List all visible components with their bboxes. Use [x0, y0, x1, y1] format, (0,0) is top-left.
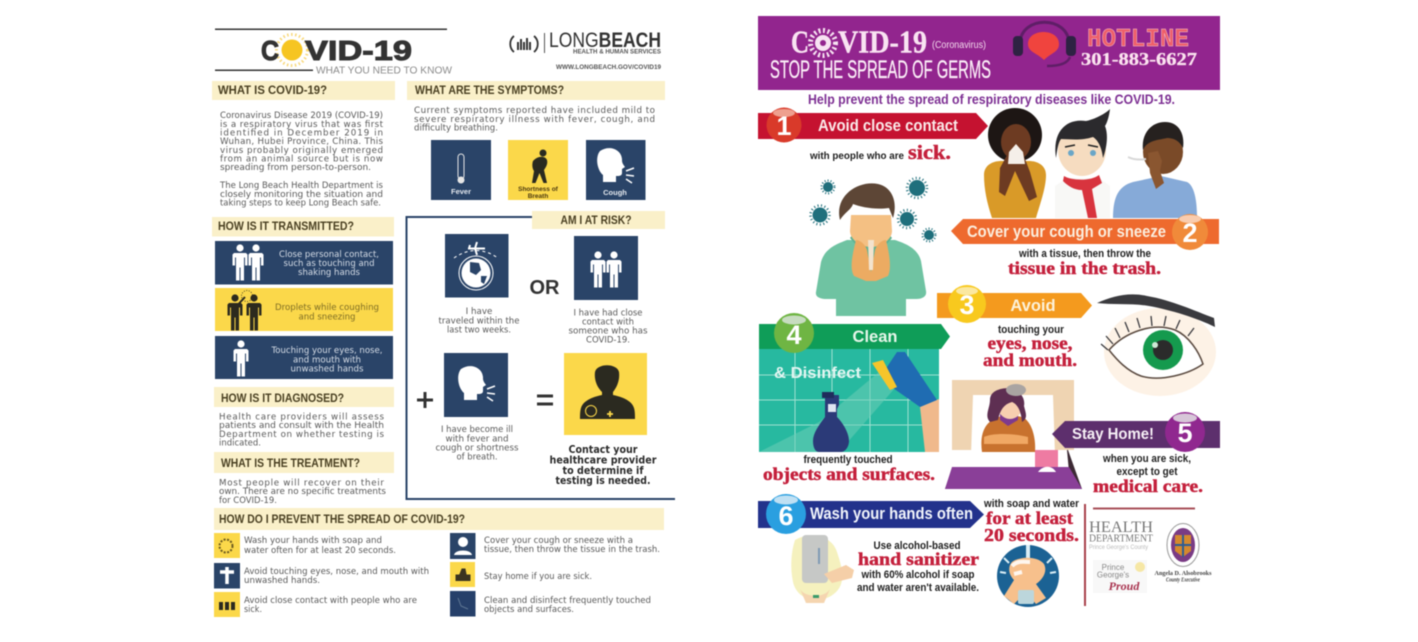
tip: avoid touching: unwashed hands. [244, 576, 320, 586]
tip: avoid close contact: sick. [244, 605, 262, 615]
logo: health department [1089, 519, 1154, 551]
title: COVID-19: C [791, 24, 809, 60]
caption: hand sanitizer [857, 540, 979, 594]
icon: city skyline [510, 36, 538, 52]
text: travelled: I have [466, 307, 492, 317]
heading: WHAT IS THE TREATMENT? [221, 458, 360, 470]
step 3: avoid touching [937, 285, 1092, 370]
illustration: sick woman in bed [945, 380, 1082, 489]
caption [1093, 453, 1203, 496]
subtitle: WHAT YOU NEED TO KNOW [316, 64, 452, 76]
body text: taking steps to keep Long Beach safe. [220, 198, 381, 208]
plus sign [417, 392, 433, 408]
body text [219, 412, 384, 448]
tip: avoid close contact: Avoid close contact with people who are [244, 596, 417, 606]
logo: Prince George's Proud: George's [1097, 570, 1129, 580]
icon: doctor [564, 353, 647, 435]
body text: severe respiratory illness with fever, cough, and [414, 115, 655, 125]
coronavirus label: (Coronavirus) [932, 40, 986, 51]
text: close contact: I have had close [574, 308, 642, 318]
tip: avoid close contact [214, 592, 417, 617]
icon: shortness of breath [508, 140, 568, 200]
title letters VID-19: VID-19 [305, 35, 412, 66]
tile background [759, 349, 939, 452]
card: touching face [215, 336, 393, 379]
equals sign [537, 396, 553, 404]
caption: objects and surfaces. [763, 464, 935, 484]
phone number: 301-883-6627 [1081, 49, 1197, 69]
step 5: stay home: Stay Home! [1072, 426, 1154, 443]
icon: shortness of breath: Shortness of [518, 186, 559, 193]
body text: for COVID-19. [219, 496, 277, 506]
logo: health department: HEALTH [1089, 519, 1153, 536]
title: COVID-19: VID-19 [838, 24, 927, 60]
tip: stay home: Stay home if you are sick. [484, 572, 592, 582]
body text: Coronavirus Disease 2019 (COVID-19) [220, 111, 383, 121]
icon: fever [431, 140, 491, 200]
rule above title [215, 28, 447, 30]
caption: sick. [908, 142, 951, 164]
step 2: cover your cough [951, 214, 1219, 278]
text: close contact: COVID-19. [586, 336, 630, 346]
panel: am I at risk [406, 211, 675, 499]
caption [809, 142, 951, 164]
subtitle: STOP THE SPREAD OF GERMS [770, 56, 991, 84]
caption: hand sanitizer: Use alcohol-based [874, 540, 960, 552]
step 5: stay home [1052, 412, 1220, 496]
hotline: HOTLINE [1087, 24, 1189, 54]
section: what is COVID-19 [212, 81, 395, 208]
step 5: stay home: 5 [1177, 418, 1193, 448]
step 6: wash your hands: 6 [778, 501, 794, 531]
logo wordmark: LONGBEACH [549, 29, 661, 52]
step 1: avoid close contact: 1 [776, 111, 792, 141]
step 3: avoid touching: Avoid [1010, 297, 1056, 315]
subheading: Help prevent the spread of respiratory diseases like COVID-19. [808, 91, 1175, 107]
icon: headset [1013, 22, 1076, 66]
heading: WHAT IS COVID-19? [218, 85, 327, 97]
tip: avoid touching: Avoid touching eyes, nose, and mouth with [244, 567, 429, 577]
body text: from an animal source but is now [220, 154, 383, 164]
text: contact provider: testing is needed. [556, 475, 650, 487]
step 4: clean and disinfect: & Disinfect [774, 365, 861, 382]
body text: virus probably originally emerged [220, 146, 383, 156]
caption: except to get [1116, 466, 1178, 478]
text: became ill [436, 425, 519, 462]
heading: HOW DO I PREVENT THE SPREAD OF COVID-19? [219, 514, 465, 526]
text: close contact: someone who has [568, 326, 648, 336]
body text: closely monitoring the situation and [220, 190, 383, 200]
body text: The Long Beach Health Department is [219, 181, 383, 191]
text: contact provider [550, 444, 657, 487]
heading: WHAT ARE THE SYMPTOMS? [415, 85, 564, 97]
county executive [1154, 570, 1212, 584]
text: became ill: I have become ill [441, 425, 513, 435]
body text: Wuhan, Hubei Province, China. This [220, 137, 383, 147]
card: close contact [215, 241, 393, 284]
text: travelled: traveled within the [438, 317, 520, 327]
county executive: County Executive [1166, 578, 1200, 584]
illustration: sneezing man with viruses [810, 178, 936, 316]
body text: indicated. [219, 438, 261, 448]
card: droplets [215, 288, 393, 331]
panel: stop the spread of germs poster [758, 16, 1220, 607]
glove and sponge [872, 352, 939, 452]
tip: cover cough: tissue, then throw the tissue in the trash. [484, 545, 660, 555]
caption [1008, 248, 1161, 278]
icon: close contact [574, 236, 638, 300]
tip: stay home [450, 562, 592, 587]
caption: with a tissue, then throw the [1018, 248, 1151, 260]
caption: tissue in the trash. [1008, 258, 1161, 278]
body text: spreading from person-to-person. [220, 163, 371, 173]
illustration: three sick people [984, 108, 1197, 218]
logo subtitle: HEALTH & HUMAN SERVICES [573, 48, 662, 56]
caption: hand sanitizer: and water aren't available. [857, 582, 979, 594]
caption: with people who are [809, 150, 904, 162]
body text: difficulty breathing. [414, 124, 498, 134]
text: close contact [568, 308, 648, 346]
icon: sun as letter O [276, 34, 308, 66]
body text: own. There are no specific treatments [219, 487, 386, 497]
card: touching face: Touching your eyes, nose, [271, 346, 382, 356]
step 2: cover your cough: Cover your cough or sneeze [967, 223, 1166, 241]
title: COVID-19 [791, 24, 927, 60]
text: travelled: last two weeks. [447, 326, 511, 336]
icon: cough [586, 140, 646, 200]
body text: is a respiratory virus that was first [220, 120, 384, 130]
icon: ill [444, 353, 508, 417]
title: COVID-19 [261, 34, 412, 66]
step 6: wash your hands [758, 494, 1080, 607]
caption: soap and water [983, 498, 1080, 545]
card: droplets: Droplets while coughing [275, 303, 379, 313]
text: contact provider: to determine if [562, 465, 644, 477]
body text [414, 106, 655, 134]
section: how do I prevent the spread [214, 508, 664, 617]
header banner [758, 16, 1220, 90]
caption: soap and water: 20 seconds. [984, 525, 1079, 545]
spray bottle [813, 392, 849, 452]
caption: soap and water: for at least [986, 508, 1073, 528]
body text: Current symptoms reported have included mild to [414, 106, 655, 116]
tip: wash hands: Wash your hands with soap and [244, 536, 382, 546]
tip: wash hands [214, 533, 396, 558]
step 4: clean and disinfect: Clean [853, 328, 897, 346]
caption: and mouth. [983, 350, 1077, 370]
caption: hand sanitizer: hand sanitizer [858, 549, 979, 569]
website: WWW.LONGBEACH.GOV/COVID19 [556, 65, 662, 71]
tip: avoid touching [214, 563, 429, 588]
illustration: washing hands [997, 545, 1059, 607]
body text [219, 111, 384, 208]
heading: AM I AT RISK? [560, 215, 632, 227]
step 1: avoid close contact: Avoid close contact [818, 117, 958, 135]
caption: when you are sick, [1102, 453, 1191, 465]
section: symptoms [407, 81, 665, 200]
illustration: sanitizer dispenser [791, 535, 854, 603]
step 2: cover your cough: 2 [1182, 218, 1198, 248]
logo: Prince George's Proud [1093, 560, 1147, 593]
caption: medical care. [1093, 476, 1203, 496]
tip: clean surfaces: objects and surfaces. [484, 605, 574, 615]
tip: clean surfaces [450, 591, 651, 616]
tip: cover cough: Cover your cough or sneeze with a [484, 536, 633, 546]
title letter C: C [261, 35, 279, 66]
caption: hand sanitizer: with 60% alcohol if soap [861, 569, 975, 581]
card: touching face: and mouth with [293, 356, 361, 366]
tip: cover cough [450, 533, 660, 559]
body text: Department on whether testing is [219, 430, 384, 440]
body text: Health care providers will assess [219, 412, 384, 422]
panel: Long Beach COVID-19 flyer [212, 28, 675, 617]
caption: eyes, nose, [988, 333, 1072, 353]
tip: wash hands: water often for at least 20 seconds. [244, 546, 396, 556]
woman with tissue [984, 108, 1046, 218]
card: close contact: shaking hands [298, 268, 360, 278]
logo: Prince George's Proud: Proud [1109, 579, 1140, 593]
body text: patients and consult with the Health [219, 421, 384, 431]
text: became ill: with fever and [446, 434, 508, 444]
text: travelled [438, 307, 520, 336]
heading: HOW IS IT TRANSMITTED? [218, 221, 354, 233]
text: contact provider: healthcare provider [550, 454, 657, 466]
body text: Most people will recover on their [219, 478, 384, 488]
step 4: clean and disinfect [759, 313, 950, 484]
seal: Prince George's County [1167, 524, 1199, 566]
caption [763, 454, 935, 484]
caption: soap and water: with soap and water [983, 498, 1080, 510]
heading: HOW IS IT DIAGNOSED? [221, 393, 344, 405]
icon: cough: Cough [603, 188, 627, 197]
logo: Long Beach [510, 29, 662, 71]
body text [219, 478, 386, 506]
card: close contact: such as touching and [284, 259, 374, 269]
icon: virus [810, 30, 836, 56]
card: touching face: unwashed hands [290, 364, 364, 374]
icon: shortness of breath: Breath [528, 193, 548, 200]
step 4: clean and disinfect: 4 [786, 320, 802, 350]
body text: identified in December 2019 in [220, 128, 383, 138]
illustration: eye [1097, 294, 1216, 396]
caption: touching your [998, 324, 1065, 336]
step 3: avoid touching: 3 [959, 290, 975, 320]
label: or: OR [530, 277, 560, 299]
text: became ill: cough or shortness [436, 444, 519, 454]
man sneezing [1113, 122, 1197, 218]
section: how is it transmitted [212, 217, 394, 379]
text: contact provider: Contact your [568, 444, 638, 456]
tip: clean surfaces: Clean and disinfect frequently touched [484, 596, 651, 606]
caption [983, 324, 1077, 370]
icon: travel globe [445, 234, 508, 298]
logo: health department: DEPARTMENT [1089, 534, 1154, 544]
card: close contact: Close personal contact, [279, 250, 379, 260]
step 1: avoid close contact [758, 108, 988, 164]
section: what is the treatment [214, 452, 394, 506]
caption: frequently touched [804, 454, 892, 466]
card: droplets: and sneezing [298, 312, 356, 322]
man with scarf [1055, 109, 1110, 218]
text: became ill: of breath. [456, 452, 498, 462]
step 6: wash your hands: Wash your hands often [810, 505, 973, 523]
icon: fever: Fever [451, 187, 471, 196]
viruses [810, 178, 936, 242]
footer logos [1084, 504, 1212, 606]
county executive: Angela D. Alsobrooks [1154, 570, 1212, 577]
logo: Prince George's Proud: Prince [1102, 563, 1125, 572]
logo: health department: Prince George's County [1089, 545, 1148, 551]
text: close contact: contact with [582, 318, 634, 328]
section: how is it diagnosed [214, 387, 394, 448]
